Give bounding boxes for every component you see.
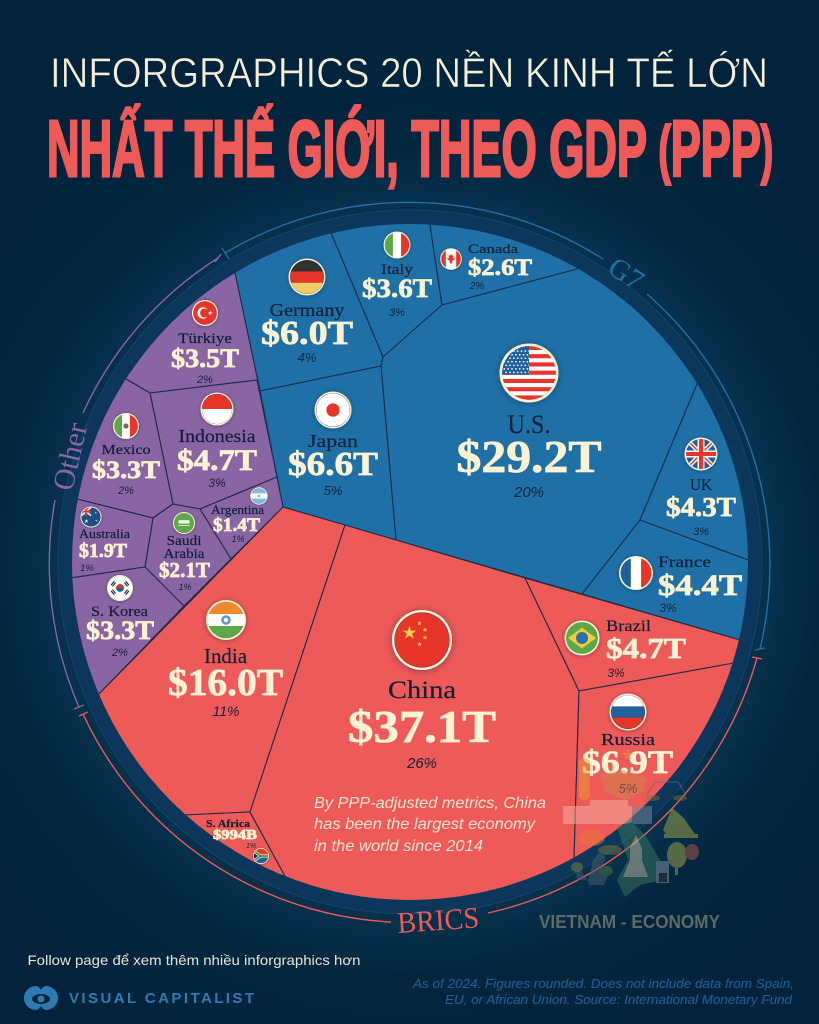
- group label: Other: Other: [47, 420, 94, 494]
- country: Mexico: $3.3T: [92, 457, 160, 484]
- country: Australia: 1%: [80, 563, 94, 574]
- country: Brazil: Brazil: [606, 618, 652, 635]
- pie chart cells: [72, 224, 748, 900]
- country: Mexico: Mexico: [102, 443, 150, 458]
- logo: Visual Capitalist: [24, 986, 254, 1010]
- callout note: in the world since 2014: [314, 838, 483, 855]
- country: Canada: 2%: [469, 281, 484, 292]
- source note: As of 2024. Figures rounded. Does not include data from Spain,: [412, 976, 794, 991]
- group label: G7: G7: [602, 251, 649, 297]
- country: Türkiye: Türkiye: [178, 331, 232, 347]
- cell: Brazil: [524, 578, 739, 692]
- country: Japan: $6.6T: [288, 446, 378, 483]
- callout note: [314, 795, 546, 855]
- flag: S. Africa: [253, 848, 269, 864]
- flag: Indonesia: [200, 392, 234, 426]
- country: Canada: Canada: [468, 241, 518, 256]
- flag: India: [206, 600, 246, 640]
- country: Russia: Russia: [601, 730, 656, 749]
- country: China: $37.1T: [348, 701, 496, 752]
- country: France: $4.4T: [658, 569, 742, 602]
- country: India: 11%: [213, 703, 239, 719]
- country: Saudi Arabia: Arabia: [164, 547, 205, 562]
- cell: U.S.: [380, 268, 697, 594]
- cell: S. Africa: [185, 812, 285, 876]
- country: U.S.: $29.2T: [456, 431, 602, 482]
- country: Japan: [288, 392, 378, 498]
- flag: France: [619, 556, 653, 590]
- country: Japan: Japan: [308, 431, 358, 451]
- cell: UK: [640, 384, 748, 560]
- country: Indonesia: 3%: [208, 476, 226, 490]
- country: UK: $4.3T: [666, 492, 736, 522]
- country: Argentina: [211, 487, 268, 544]
- logo: Visual Capitalist: VISUAL CAPITALIST: [69, 990, 254, 1007]
- group label: BRICS: BRICS: [396, 901, 480, 940]
- cell: Italy: [331, 224, 442, 357]
- country: Italy: [362, 232, 432, 319]
- cell: Germany: [236, 234, 382, 390]
- cell: India: [98, 506, 345, 815]
- country: Germany: Germany: [270, 300, 344, 320]
- country: Argentina: 1%: [231, 534, 245, 544]
- country: Canada: [439, 244, 532, 289]
- country: S. Korea: $3.3T: [86, 616, 154, 645]
- callout note: has been the largest economy: [314, 816, 536, 833]
- cell: Saudi Arabia: [145, 504, 231, 606]
- country: Brazil: $4.7T: [606, 633, 686, 665]
- country: Türkiye: $3.5T: [171, 344, 239, 373]
- cell: S. Korea: [72, 566, 184, 694]
- flag: Mexico: [113, 413, 139, 439]
- country: France: [619, 554, 742, 615]
- country: S. Africa: S. Africa: [206, 818, 251, 830]
- flag: Japan: [314, 392, 352, 428]
- country: S. Africa: $994B: [213, 828, 257, 843]
- country: France: France: [658, 554, 711, 571]
- cell: Mexico: [78, 378, 174, 518]
- icon: logo mark: [24, 986, 58, 1010]
- cell: Japan: [260, 366, 396, 540]
- country: India: [168, 600, 283, 719]
- country: Russia: $6.9T: [582, 745, 673, 781]
- country: Saudi Arabia: $2.1T: [159, 558, 210, 582]
- cell: Argentina: [200, 477, 283, 559]
- country: Japan: 5%: [324, 483, 342, 498]
- flag: UK: [684, 438, 718, 470]
- cell: Indonesia: [150, 380, 277, 509]
- country: Saudi Arabia: Saudi: [166, 534, 202, 549]
- country: Indonesia: Indonesia: [178, 426, 256, 446]
- cell: Australia: [72, 498, 154, 578]
- country: Australia: $1.9T: [79, 540, 128, 562]
- title: [47, 49, 773, 193]
- country: UK: [666, 438, 736, 538]
- country: France: 3%: [659, 601, 677, 615]
- country: Saudi Arabia: 1%: [178, 582, 192, 592]
- title line 1: INFORGRAPHICS 20 NỀN KINH TẾ LỚN: [50, 49, 768, 96]
- ring around chart: [58, 210, 762, 914]
- country: S. Korea: 2%: [111, 647, 128, 659]
- country: S. Africa: [206, 818, 269, 864]
- cell: Türkiye: [126, 272, 260, 392]
- country: Argentina: Argentina: [211, 502, 264, 517]
- country: U.S.: 20%: [513, 484, 544, 501]
- country: Italy: $3.6T: [362, 274, 432, 303]
- flag: Türkiye: [192, 300, 218, 326]
- country: Australia: Australia: [79, 526, 130, 541]
- flag: Australia: [80, 506, 102, 528]
- country: S. Africa: 1%: [246, 843, 256, 850]
- country: Russia: 5%: [619, 781, 637, 796]
- flag: Brazil: [564, 620, 600, 656]
- country: Mexico: [92, 413, 160, 497]
- country: Canada: $2.6T: [468, 255, 532, 280]
- country: Argentina: $1.4T: [213, 515, 260, 536]
- country: Italy: 3%: [389, 307, 405, 319]
- cell: France: [582, 520, 748, 639]
- country: Mexico: 2%: [117, 485, 134, 497]
- country: India: $16.0T: [168, 662, 283, 704]
- country: Türkiye: 2%: [196, 374, 213, 386]
- country: S. Korea: [86, 575, 154, 659]
- country: Türkiye: [171, 300, 239, 386]
- country: Australia: [79, 506, 130, 574]
- flag: Saudi Arabia: [173, 512, 195, 534]
- flag: Argentina: [250, 487, 268, 505]
- country: China: China: [388, 677, 456, 704]
- flag: Canada: [440, 248, 462, 270]
- source note: [412, 976, 794, 1007]
- cell: China: [250, 524, 578, 900]
- country: Germany: [261, 258, 353, 365]
- country: U.S.: [456, 344, 602, 501]
- country: Indonesia: $4.7T: [177, 444, 257, 477]
- cell: Russia: [574, 662, 732, 858]
- cell: Canada: [430, 224, 577, 305]
- source note: EU, or African Union. Source: International Monetary Fund: [445, 992, 793, 1007]
- group arc: Other: [49, 254, 221, 709]
- country: India: India: [204, 644, 248, 668]
- group arc: G7: [222, 202, 770, 650]
- country: UK: 3%: [693, 526, 709, 538]
- country: U.S.: U.S.: [508, 410, 550, 439]
- country: China: [348, 610, 496, 772]
- flag: China: [392, 610, 452, 670]
- country: S. Korea: S. Korea: [91, 604, 148, 620]
- callout note: By PPP-adjusted metrics, China: [314, 795, 546, 812]
- country: Indonesia: [177, 392, 257, 490]
- title line 2: (: [659, 113, 671, 185]
- country: UK: UK: [690, 477, 712, 494]
- watermark illustration: [563, 749, 699, 897]
- flag: Italy: [384, 232, 410, 258]
- country: Brazil: 3%: [607, 666, 625, 680]
- flag: Russia: [610, 694, 646, 730]
- watermark text: VIETNAM - ECONOMY: [539, 912, 720, 932]
- country: Germany: 4%: [298, 350, 316, 365]
- group arc: BRICS: [79, 657, 762, 922]
- flag: U.S.: [500, 344, 558, 402]
- title line 2: ): [761, 113, 773, 185]
- country: China: 26%: [406, 755, 437, 772]
- country: Germany: $6.0T: [261, 315, 353, 352]
- country: Brazil: [564, 618, 686, 680]
- flag: Germany: [288, 258, 326, 296]
- country: Saudi Arabia: [159, 512, 210, 592]
- follow line: Follow page để xem thêm nhiều inforgraphics hơn: [28, 952, 360, 968]
- country: Russia: [582, 694, 673, 796]
- flag: S. Korea: [107, 575, 133, 601]
- country: Italy: Italy: [381, 262, 414, 278]
